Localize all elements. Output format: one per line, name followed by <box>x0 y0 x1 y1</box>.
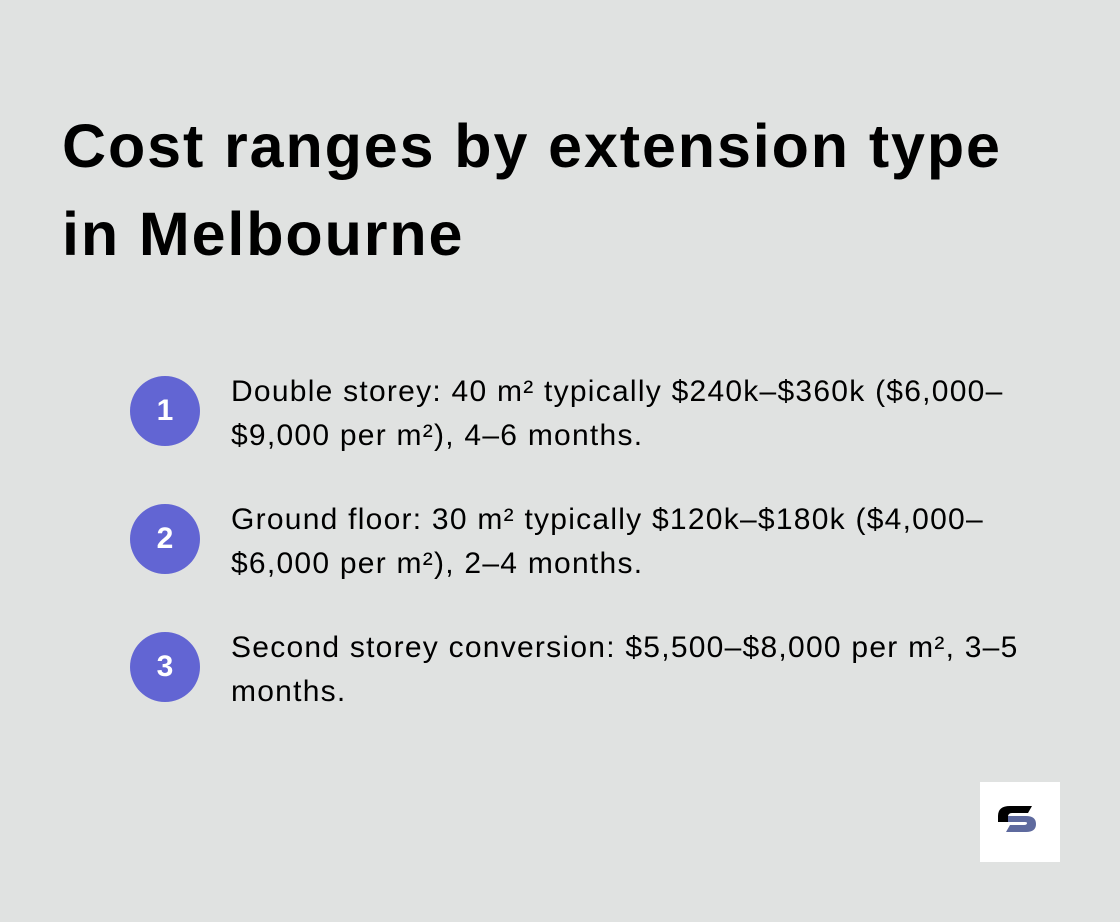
title <box>62 112 1002 268</box>
badge 1 <box>130 376 200 446</box>
text 1 <box>231 375 1004 452</box>
text 2: $6,000 per m²), 2–4 months. <box>231 547 643 580</box>
text 3: Second storey conversion: $5,500–$8,000 per m², 3–5 <box>231 631 1019 664</box>
item 3 <box>130 631 1019 708</box>
badge 2 <box>130 504 200 574</box>
badge 2: 2 <box>157 522 173 555</box>
text 2 <box>231 503 984 580</box>
title: Cost ranges by extension type <box>62 112 1002 180</box>
title: in Melbourne <box>62 200 464 268</box>
text 1: Double storey: 40 m² typically $240k–$360k ($6,000– <box>231 375 1004 408</box>
text 3 <box>231 631 1019 708</box>
badge 3 <box>130 632 200 702</box>
text 1: $9,000 per m²), 4–6 months. <box>231 419 643 452</box>
badge 3: 3 <box>157 650 173 683</box>
logo <box>980 782 1060 862</box>
item 1 <box>130 375 1004 452</box>
text 3: months. <box>231 675 346 708</box>
badge 1: 1 <box>157 394 173 427</box>
text 2: Ground floor: 30 m² typically $120k–$180k ($4,000– <box>231 503 984 536</box>
item 2 <box>130 503 984 580</box>
